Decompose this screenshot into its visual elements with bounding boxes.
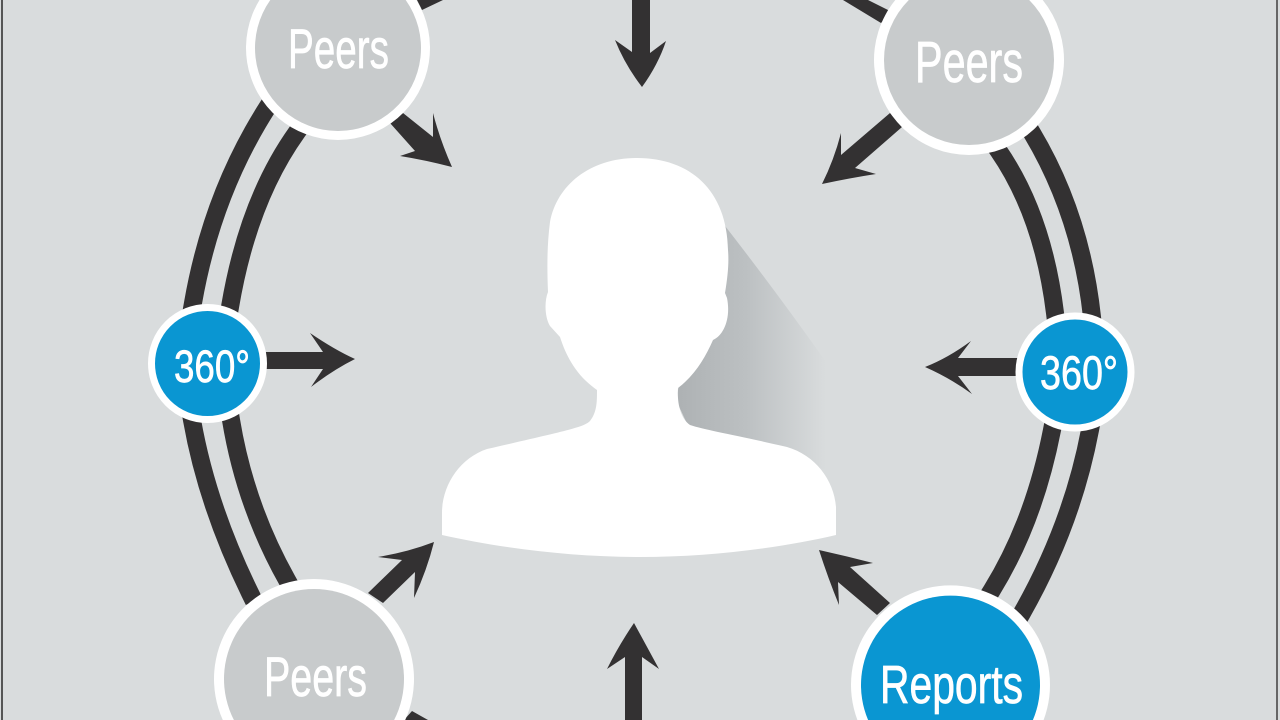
arrow stub: top-left peers (417, 0, 443, 10)
person shadow (676, 222, 826, 470)
arrow stub: top-right peers (843, 0, 892, 23)
arrow: top-left peers to centre (390, 113, 452, 167)
node: peers bottom-left: Peers (264, 645, 367, 708)
node: peers top-left (246, 0, 430, 140)
ring: double line bottom-right (992, 430, 1090, 613)
node: peers top-right: Peers (915, 30, 1023, 95)
ring: double line top-left (193, 108, 297, 307)
ring: double line top-right (998, 133, 1092, 317)
arrow: bottom centre (607, 623, 659, 720)
node: 360 left (152, 308, 264, 420)
node: reports bottom-right: Reports (880, 655, 1023, 715)
node: 360 left: 360° (174, 341, 250, 392)
arrow: top-right peers to centre (822, 113, 902, 184)
node: peers top-right (874, 0, 1064, 155)
node: peers bottom-left (214, 579, 414, 720)
node: peers top-left: Peers (288, 17, 389, 80)
arrow: left 360 to centre (262, 333, 355, 387)
arrow: bottom-left peers to centre (368, 542, 434, 603)
arrow stub: bottom-left peers (404, 711, 428, 720)
arrow: top centre (615, 0, 666, 87)
arrow: bottom-right reports to centre (819, 550, 890, 615)
node: 360 right (1019, 316, 1131, 428)
arrow: right 360 to centre (925, 341, 1020, 394)
ring: double line bottom-left (192, 420, 287, 593)
person silhouette (442, 158, 836, 557)
node: 360 right: 360° (1040, 346, 1118, 399)
node: reports bottom-right (851, 585, 1050, 720)
